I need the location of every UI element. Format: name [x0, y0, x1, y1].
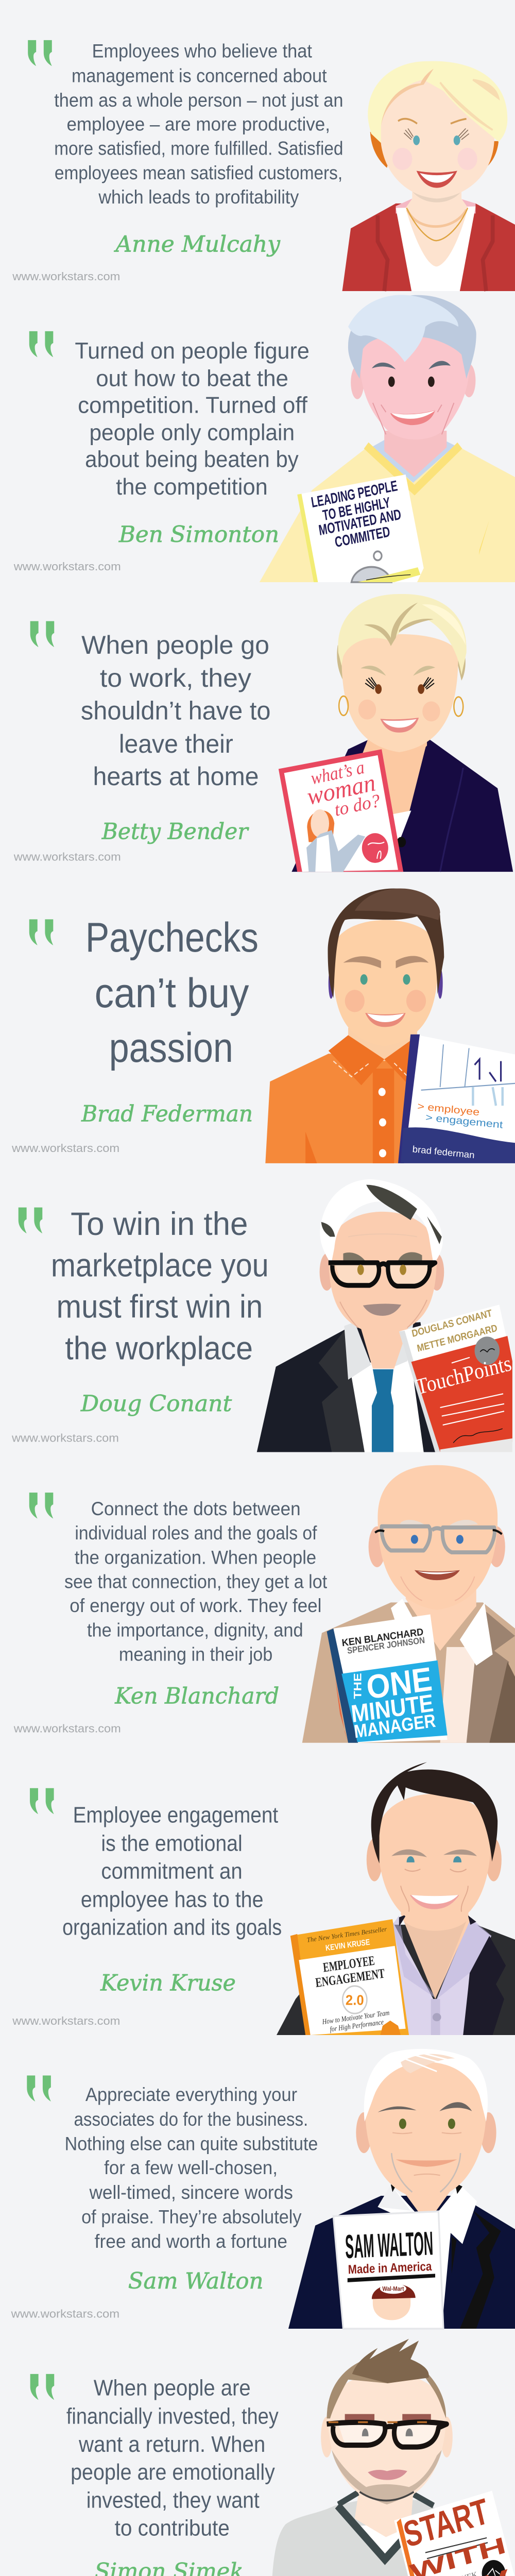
author name: Ken Blanchard [114, 1683, 279, 1709]
website: www.workstars.com [11, 2308, 119, 2320]
quote text: When people are [94, 2375, 251, 2400]
website: www.workstars.com [11, 1142, 119, 1155]
book: Employee Engagement: brad federman [412, 1144, 475, 1160]
quote text: organization and its goals [62, 1914, 282, 1940]
quote text: of energy out of work. They feel [70, 1595, 321, 1617]
book: Employee Engagement 2.0: EMPLOYEE [322, 1953, 375, 1975]
book: TouchPoints: TouchPoints [414, 1351, 513, 1399]
quote text: is the emotional [101, 1831, 243, 1856]
quote text: employee has to the [81, 1887, 263, 1912]
quote text: financially invested, they [66, 2403, 279, 2429]
quote text: free and worth a fortune [95, 2231, 287, 2252]
author name: Ben Simonton [118, 521, 279, 548]
quote text: the organization. When people [75, 1547, 316, 1568]
quote text: want a return. When [78, 2432, 265, 2457]
book: Employee Engagement 2.0: for High Performance [330, 2018, 384, 2033]
quote text: about being beaten by [85, 446, 299, 472]
website: www.workstars.com [13, 1723, 121, 1735]
portrait: Betty Bender [291, 594, 513, 872]
quote text: Employees who believe that [92, 41, 312, 62]
book: Employee Engagement 2.0 [290, 1919, 409, 2035]
website: www.workstars.com [12, 270, 120, 283]
panel: Betty Bender quote [13, 594, 513, 872]
quote text [75, 338, 310, 499]
quote text: meaning in their job [119, 1644, 272, 1665]
quote mark [29, 331, 53, 357]
quote text: invested, they want [87, 2487, 260, 2513]
quote text: Appreciate everything your [85, 2084, 297, 2106]
quote text: When people go [81, 631, 269, 660]
quote text: passion [109, 1025, 233, 1071]
quote text [66, 2375, 279, 2540]
book: TouchPoints: METTE MORGAARD [416, 1322, 498, 1354]
author name: Kevin Kruse [100, 1970, 236, 1996]
quote text: which leads to profitability [98, 187, 299, 208]
book: Employee Engagement 2.0: The New York Times Bestseller [306, 1925, 387, 1944]
panel: Ken Blanchard quote [13, 1465, 515, 1743]
quote text: them as a whole person – not just an [54, 90, 343, 111]
quote text: well-timed, sincere words [89, 2182, 293, 2203]
book: The One Minute Manager: MANAGER [353, 1710, 437, 1742]
quote text: competition. Turned off [78, 392, 307, 418]
quote mark [30, 1788, 54, 1814]
quote text: people only complain [89, 419, 295, 445]
quote text: to work, they [100, 664, 251, 693]
quote text: employee – are more productive, [66, 114, 330, 135]
quote text [81, 631, 271, 791]
quote text: Turned on people figure [75, 338, 310, 364]
book: Start With Why: START [400, 2491, 492, 2555]
quote text [65, 2084, 318, 2252]
quote text: of praise. They’re absolutely [81, 2206, 302, 2228]
website: www.workstars.com [13, 851, 121, 863]
quote mark [30, 621, 54, 647]
book: The One Minute Manager: THE [351, 1673, 364, 1699]
book: Sam Walton Made in America [333, 2211, 443, 2329]
quote text: leave their [119, 730, 233, 758]
portrait: Ken Blanchard [302, 1465, 515, 1743]
quote text: people are emotionally [71, 2460, 275, 2484]
author name: Betty Bender [101, 818, 249, 844]
quote mark [28, 40, 52, 66]
book: What's a woman to do: to do? [333, 791, 382, 820]
book: The One Minute Manager: ONE [365, 1660, 434, 1706]
quote text: out how to beat the [96, 365, 288, 391]
book: What's a woman to do: woman [305, 769, 377, 810]
website: www.workstars.com [11, 1432, 119, 1445]
quote text [54, 41, 343, 208]
quote text [85, 914, 259, 1071]
quote mark [29, 919, 53, 945]
quote text: Employee engagement [73, 1803, 279, 1827]
quote text: hearts at home [93, 762, 259, 791]
quote text: marketplace you [51, 1247, 269, 1283]
book: Sam Walton Made in America: Made in America [348, 2259, 433, 2277]
book: Leading People [297, 474, 424, 582]
book: Leading People: LEADING PEOPLE [310, 477, 399, 511]
book: Leading People: MOTIVATED AND [317, 505, 402, 538]
book: Employee Engagement: > engagement [425, 1111, 503, 1130]
quote text: Connect the dots between [91, 1498, 301, 1519]
book: Employee Engagement 2.0: ENGAGEMENT [315, 1966, 385, 1990]
book: Employee Engagement: > employee [417, 1100, 480, 1117]
quote text [62, 1803, 282, 1940]
panel: Anne Mulcahy quote [12, 40, 515, 291]
quote text: can’t buy [95, 970, 249, 1016]
website: www.workstars.com [13, 561, 121, 573]
book: Leading People: COMMITED [334, 523, 391, 551]
portrait: Anne Mulcahy [342, 61, 515, 291]
book: Employee Engagement [398, 1035, 515, 1163]
portrait: Kevin Kruse [277, 1762, 515, 2035]
book: The One Minute Manager: MINUTE [350, 1689, 435, 1728]
quote text: the competition [116, 474, 268, 499]
website: www.workstars.com [12, 2015, 120, 2027]
quote text: must first win in [57, 1288, 263, 1325]
portrait: Brad Federman [265, 889, 460, 1163]
panel: Kevin Kruse quote [12, 1762, 515, 2035]
quote mark [30, 2374, 54, 2400]
book: The One Minute Manager: SPENCER JOHNSON [347, 1635, 425, 1656]
portrait: Ben Simonton [260, 295, 515, 582]
panel: Sam Walton quote [11, 2049, 515, 2329]
book: The One Minute Manager [327, 1614, 448, 1743]
author name: Sam Walton [128, 2268, 263, 2294]
panel: Brad Federman quote [11, 889, 515, 1163]
book: TouchPoints [399, 1304, 513, 1452]
book: Sam Walton Made in America: Wal-Mart [382, 2286, 404, 2293]
quote text: more satisfied, more fulfilled. Satisfied [54, 138, 343, 159]
book: Start With Why [394, 2491, 515, 2576]
quote text: management is concerned about [72, 65, 327, 87]
author name: Doug Conant [80, 1391, 232, 1417]
book: Employee Engagement 2.0: How to Motivate Your Team [321, 2008, 390, 2026]
quote text: the importance, dignity, and [87, 1620, 303, 1641]
author name: Brad Federman [81, 1100, 253, 1127]
quote text: see that connection, they get a lot [64, 1571, 327, 1592]
portrait: Simon Simek [271, 2339, 515, 2576]
author name: Anne Mulcahy [113, 231, 281, 257]
quote text: to contribute [115, 2515, 230, 2540]
quote text: employees mean satisfied customers, [55, 162, 342, 184]
quote text: Nothing else can quite substitute [65, 2133, 318, 2155]
quote mark [29, 1493, 53, 1519]
portrait: Doug Conant [257, 1179, 444, 1452]
panel: Ben Simonton quote [13, 295, 515, 582]
quote mark [27, 2076, 51, 2102]
panel: Doug Conant quote [11, 1179, 513, 1452]
portrait: Sam Walton [288, 2049, 515, 2329]
quote text: shouldn’t have to [81, 697, 271, 725]
quote text: To win in the [71, 1206, 248, 1242]
book: The One Minute Manager: KEN BLANCHARD [341, 1626, 424, 1649]
book: Leading People: TO BE HIGHLY [321, 494, 391, 524]
quote text: individual roles and the goals of [75, 1522, 317, 1544]
quote text: commitment an [101, 1858, 243, 1884]
book: Employee Engagement 2.0: KEVIN KRUSE [325, 1938, 370, 1953]
quote mark [19, 1208, 42, 1233]
panel: Simon Simek quote [12, 2339, 515, 2576]
quote text [51, 1206, 269, 1366]
book: What's a woman to do [279, 749, 403, 872]
quote text: for a few well-chosen, [104, 2157, 278, 2179]
book: TouchPoints: DOUGLAS CONANT [410, 1307, 493, 1339]
quote text: associates do for the business. [74, 2109, 308, 2130]
book: What's a woman to do: what’s a [310, 757, 366, 789]
quote text [64, 1498, 327, 1665]
quote text: Paychecks [85, 914, 259, 961]
book: Employee Engagement 2.0: 2.0 [346, 1993, 364, 2008]
quote text: the workplace [65, 1330, 253, 1366]
